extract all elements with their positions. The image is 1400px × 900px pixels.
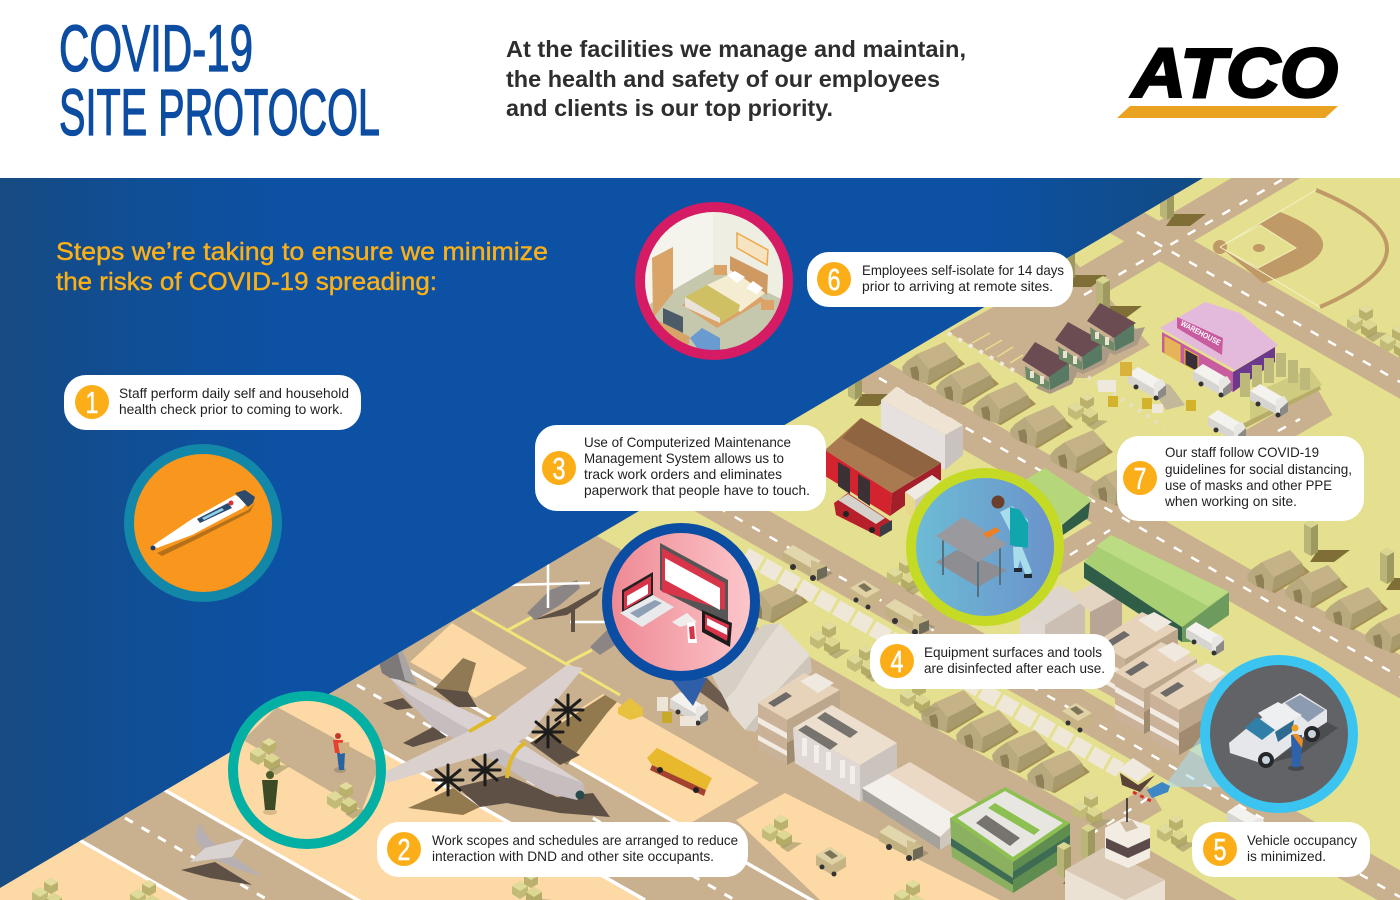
fire station and office [825, 387, 963, 516]
vehicles [783, 545, 1265, 876]
roads [570, 152, 1400, 900]
callout 3: Management System allows us to [584, 451, 784, 466]
parking lot [948, 262, 1150, 378]
callout 7: use of masks and other PPE [1165, 478, 1332, 493]
icon circle: bedroom [635, 205, 795, 360]
callout 3: 3 [552, 451, 566, 486]
icon circle: thermometer [129, 449, 277, 597]
warehouse building: WAREHOUSE [1179, 319, 1223, 348]
callout 1: 1 [86, 385, 98, 420]
helicopter [507, 560, 615, 655]
warehouse building [1160, 302, 1278, 392]
camera beam [1166, 737, 1220, 787]
ATCO logo: ATCO [1130, 34, 1338, 112]
heading: steps [56, 238, 548, 296]
control tower [1057, 798, 1165, 900]
transport aircraft [312, 588, 585, 800]
callout 6 [807, 252, 1073, 307]
title: COVID-19 [59, 11, 253, 85]
runway lines [76, 659, 815, 900]
helipad markings [472, 610, 620, 695]
callout 5 [1192, 822, 1370, 877]
gate car [1147, 782, 1170, 798]
callout 2: Work scopes and schedules are arranged to reduce [432, 833, 738, 848]
callout 5: is minimized. [1247, 849, 1326, 864]
icon circle: computers [607, 528, 755, 706]
airfield sand areas [0, 623, 1000, 900]
crate clusters [32, 305, 1400, 900]
parking lines [972, 333, 1023, 363]
callout 5: Vehicle occupancy [1247, 833, 1357, 848]
trees [848, 184, 1400, 590]
gate and guard booth [1118, 758, 1155, 802]
callout 6: 6 [828, 262, 840, 297]
green-roof shed [1025, 468, 1092, 535]
callout 5: 5 [1214, 832, 1226, 867]
long warehouse [862, 762, 979, 850]
grass area [597, 178, 1400, 900]
beige building by hangar [758, 673, 840, 765]
runway dashes [125, 685, 740, 900]
callout 3 [535, 425, 826, 511]
warehouse yard [1088, 368, 1322, 430]
callout 3: Use of Computerized Maintenance [584, 435, 791, 450]
warehouse vehicles and pallets [1098, 362, 1288, 444]
small white building [905, 475, 941, 510]
heading: steps: the risks of COVID-19 spreading: [56, 268, 437, 296]
office building [793, 705, 897, 802]
aircraft shadows [383, 658, 617, 817]
callout 4 [870, 634, 1115, 689]
tagline [506, 36, 966, 121]
tents rows [745, 342, 1400, 793]
callout 6: Employees self-isolate for 14 days [862, 263, 1064, 278]
cargo at hangar [618, 692, 708, 726]
propellers [433, 695, 583, 795]
callout 1 [64, 375, 361, 430]
green building [950, 787, 1070, 893]
icon circle: social distancing [230, 695, 385, 845]
callout 2 [377, 822, 748, 877]
callout 7 [1117, 436, 1364, 521]
hangar [700, 623, 812, 732]
title: SITE PROTOCOL [59, 75, 380, 149]
fire truck [834, 493, 892, 537]
houses [1022, 303, 1145, 394]
callout 7: when working on site. [1164, 494, 1297, 509]
fence along parking [948, 333, 1018, 373]
warehouse hedge trees [1240, 353, 1310, 397]
callout 1: health check prior to coming to work. [119, 402, 343, 417]
title [59, 11, 380, 149]
callout 2: 2 [398, 832, 410, 867]
heading: steps: Steps we’re taking to ensure we minimize [56, 238, 548, 266]
callout 3: paperwork that people have to touch. [584, 483, 810, 498]
apartment blocks [1096, 612, 1232, 755]
callout 4: 4 [890, 644, 904, 679]
callout 7: 7 [1134, 461, 1146, 496]
callout 4: are disinfected after each use. [924, 661, 1105, 676]
callout 4: Equipment surfaces and tools [924, 645, 1102, 660]
icon circle: disinfecting [911, 473, 1059, 621]
green barrack [1084, 535, 1229, 656]
callout 1: Staff perform daily self and household [119, 386, 349, 401]
fuel tanker [647, 748, 712, 796]
callout 7: guidelines for social distancing, [1165, 462, 1352, 477]
fighter jet [181, 823, 263, 885]
callout 7: Our staff follow COVID-19 [1165, 445, 1319, 460]
tagline: At the facilities we manage and maintain, [506, 36, 966, 62]
icon circle: pickup truck [1205, 660, 1353, 808]
tagline: and clients is our top priority. [506, 95, 833, 121]
baseball field [1213, 190, 1387, 307]
concrete wall [745, 555, 1120, 770]
callout 2: interaction with DND and other site occupants. [432, 849, 714, 864]
road dashes [700, 178, 1400, 897]
callout 3: track work orders and eliminates [584, 467, 782, 482]
tagline: the health and safety of our employees [506, 66, 940, 92]
callout 6: prior to arriving at remote sites. [862, 279, 1053, 294]
white header band [0, 0, 1400, 178]
central buildings [1020, 584, 1122, 637]
